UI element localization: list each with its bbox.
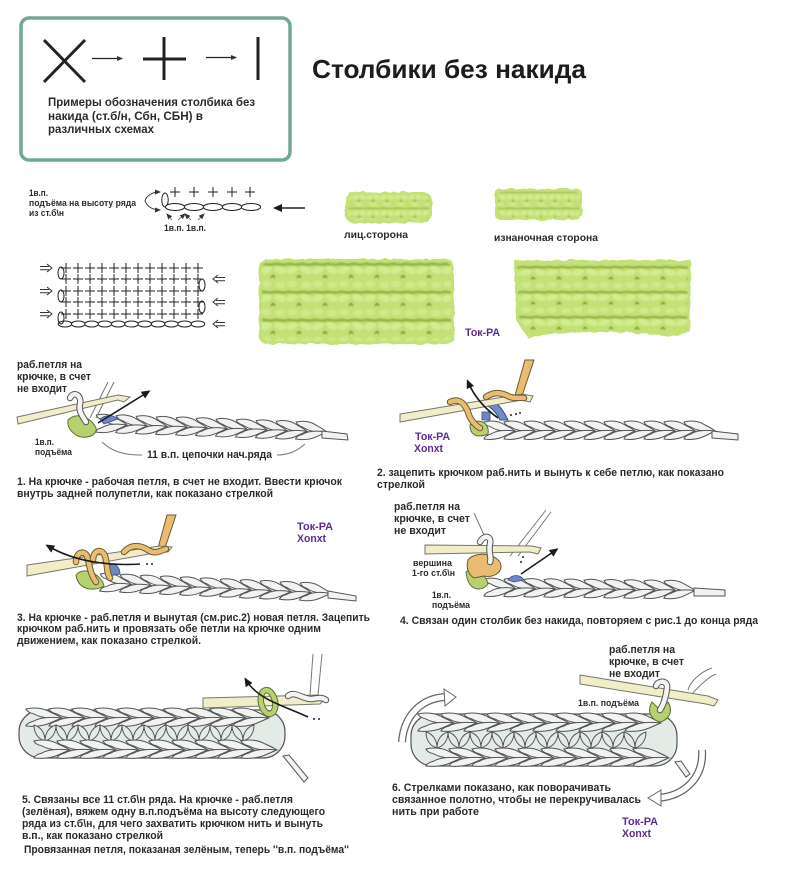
callout: 11 chains: 11 в.п. цепочки нач.ряда <box>147 449 273 461</box>
callout: working loop: не входит <box>394 525 447 537</box>
step 1 text: внутрь задней полупетли, как показано стрелкой <box>17 488 273 500</box>
step 2 text: 2. зацепить крючком раб.нить и вынуть к себе петлю, как показано <box>377 467 724 479</box>
callout: working loop: крючке, в счет <box>17 371 92 383</box>
arrow: left turning arrow <box>402 689 456 742</box>
rows of plus symbols <box>61 263 203 319</box>
chain <box>100 573 331 602</box>
movement arrow <box>98 392 148 423</box>
callout: turning chain: 1в.п. подъёма <box>578 698 640 708</box>
callout: turning chain <box>432 590 471 610</box>
callout: working loop <box>394 501 484 537</box>
label: wrong side: изнаночная сторона <box>494 232 598 244</box>
callout: 11 chains <box>102 442 305 461</box>
callout: working loop: не входит <box>609 668 661 680</box>
movement arrow <box>521 550 556 574</box>
swatch: wrong side large <box>514 260 691 338</box>
chain <box>96 414 327 440</box>
label: right side: лиц.сторона <box>344 229 408 241</box>
callout: working loop <box>17 359 92 395</box>
callout: working loop: не входит <box>17 383 68 395</box>
swatch: right side large <box>259 259 454 344</box>
panel caption <box>48 97 255 136</box>
watermark: Ток-РА <box>415 431 450 443</box>
callout: top of stitch: 1-го ст.б\н <box>412 568 455 578</box>
panel caption: Примеры обозначения столбика без <box>48 97 255 109</box>
step 1 text <box>17 476 342 500</box>
step 3 text: крючком раб.нить и провязать обе петли на крючке одним <box>17 623 321 635</box>
schema label: из ст.б\н <box>29 208 64 218</box>
stitch caption: 1в.п. 1в.п. <box>164 223 206 233</box>
step 6 watermark: Xonxt <box>622 828 651 840</box>
step 3 text <box>17 612 370 647</box>
title: Столбики без накида <box>312 54 587 84</box>
chain row <box>58 321 205 327</box>
hook <box>27 546 172 576</box>
watermark: Ток-РА <box>465 327 500 339</box>
callout: top of stitch <box>412 558 455 578</box>
large schema: several rows <box>40 263 225 328</box>
step 5 text: в.п., как показано стрелкой <box>22 830 163 842</box>
step 3 watermark <box>297 521 333 545</box>
step 2 illustration <box>400 360 738 455</box>
step 3 text: движением, как показано стрелкой. <box>17 635 201 647</box>
movement arrow <box>468 382 498 418</box>
step 5 text: ряда из ст.б\н, для чего захватить крючком нить и вынуть <box>22 818 323 830</box>
icon: vertical bar symbol <box>256 37 260 80</box>
step 3 illustration <box>27 515 356 602</box>
step 6 watermark <box>622 816 658 840</box>
step 1 text: 1. На крючке - рабочая петля, в счет не входит. Ввести крючок <box>17 476 342 488</box>
schema label: 1в.п. <box>29 188 48 198</box>
hook <box>580 675 718 706</box>
callout: working loop: раб.петля на <box>609 644 676 656</box>
chain <box>484 421 715 439</box>
panel: symbol examples <box>21 18 290 160</box>
step 5 text <box>22 794 349 856</box>
watermark: Xonxt <box>414 443 443 455</box>
callout: working loop: раб.петля на <box>394 501 461 513</box>
schema label <box>29 188 137 218</box>
callout: working loop: крючке, в счет <box>394 513 471 525</box>
step 2 text: стрелкой <box>377 479 425 491</box>
step 3 watermark: Xonxt <box>297 533 326 545</box>
callout: working loop: раб.петля на <box>17 359 83 371</box>
hook <box>203 695 325 708</box>
step 5 text: (зелёная), вяжем одну в.п.подъёма на высоту следующего <box>22 806 325 818</box>
small schema: first row <box>29 187 305 233</box>
icon: plus symbol <box>143 37 186 80</box>
step 5 illustration <box>19 654 326 782</box>
arrow <box>206 56 236 58</box>
step 4 text: 4. Связан один столбик без накида, повторяем с рис.1 до конца ряда <box>400 615 759 627</box>
movement arrow <box>48 546 140 564</box>
arrow <box>92 58 122 60</box>
callout: turning chain: 1в.п. <box>35 437 54 447</box>
hook <box>425 545 541 554</box>
step 1 illustration <box>17 359 348 461</box>
schema label: подъёма на высоту ряда <box>29 198 137 208</box>
step 2 text <box>377 467 724 491</box>
panel caption: различных схемах <box>48 124 155 136</box>
hook <box>400 394 533 422</box>
icon: X symbol <box>44 40 85 82</box>
callout: turning chain <box>35 437 73 457</box>
step 5 text: 5. Связаны все 11 ст.б\н ряда. На крючке - раб.петля <box>22 794 293 806</box>
step 6 text: нить при работе <box>392 806 479 818</box>
step 5 text: Провязанная петля, показаная зелёным, теперь ''в.п. подъёма'' <box>24 844 349 856</box>
step 6 text: 6. Стрелками показано, как поворачивать <box>392 782 611 794</box>
swatch: wrong side small <box>494 189 598 244</box>
step 3 watermark: Ток-РА <box>297 521 333 533</box>
arrow <box>276 207 305 209</box>
hook <box>17 395 130 424</box>
movement arrow <box>246 680 308 717</box>
fabric <box>411 713 677 766</box>
watermark <box>414 431 450 455</box>
step 4 illustration <box>394 501 725 610</box>
callout: turning chain: подъёма <box>35 447 73 457</box>
arrow: right turning arrow <box>648 750 702 806</box>
chain <box>484 578 695 599</box>
callout: turning chain: 1в.п. <box>432 590 451 600</box>
fabric <box>19 708 285 758</box>
step 6 watermark: Ток-РА <box>622 816 658 828</box>
callout: turning chain: подъёма <box>432 600 471 610</box>
step 6 text: связанное полотно, чтобы не перекручивалась <box>392 794 641 806</box>
swatch: right side small <box>344 192 432 241</box>
step 3 text: 3. На крючке - раб.петля и вынутая (см.рис.2) новая петля. Зацепить <box>17 612 370 624</box>
callout: working loop: крючке, в счет <box>609 656 685 668</box>
step 6 text <box>392 782 641 818</box>
callout: working loop <box>609 644 685 680</box>
panel caption: накида (ст.б/н, Сбн, СБН) в <box>48 111 203 123</box>
step 6 illustration <box>402 644 718 806</box>
callout: top of stitch: вершина <box>413 558 453 568</box>
